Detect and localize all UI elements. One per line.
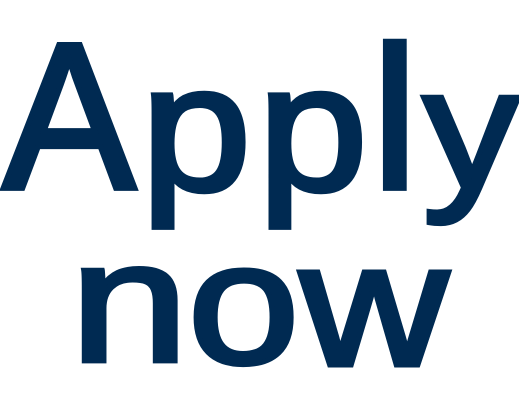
heading line 2: now: w bbox=[298, 207, 450, 403]
heading line 1: Apply: y bbox=[423, 33, 519, 226]
heading line 1: Apply bbox=[3, 1, 519, 234]
heading line 1: Apply: l bbox=[372, 6, 418, 232]
heading line 2: now: o bbox=[188, 207, 299, 401]
heading line 2: now: n bbox=[70, 206, 188, 399]
heading line 1: Apply: p bbox=[141, 28, 251, 230]
heading line 2: now bbox=[70, 206, 450, 403]
heading line 1: Apply: p bbox=[258, 28, 368, 230]
heading line 1: Apply: A bbox=[3, 1, 136, 234]
